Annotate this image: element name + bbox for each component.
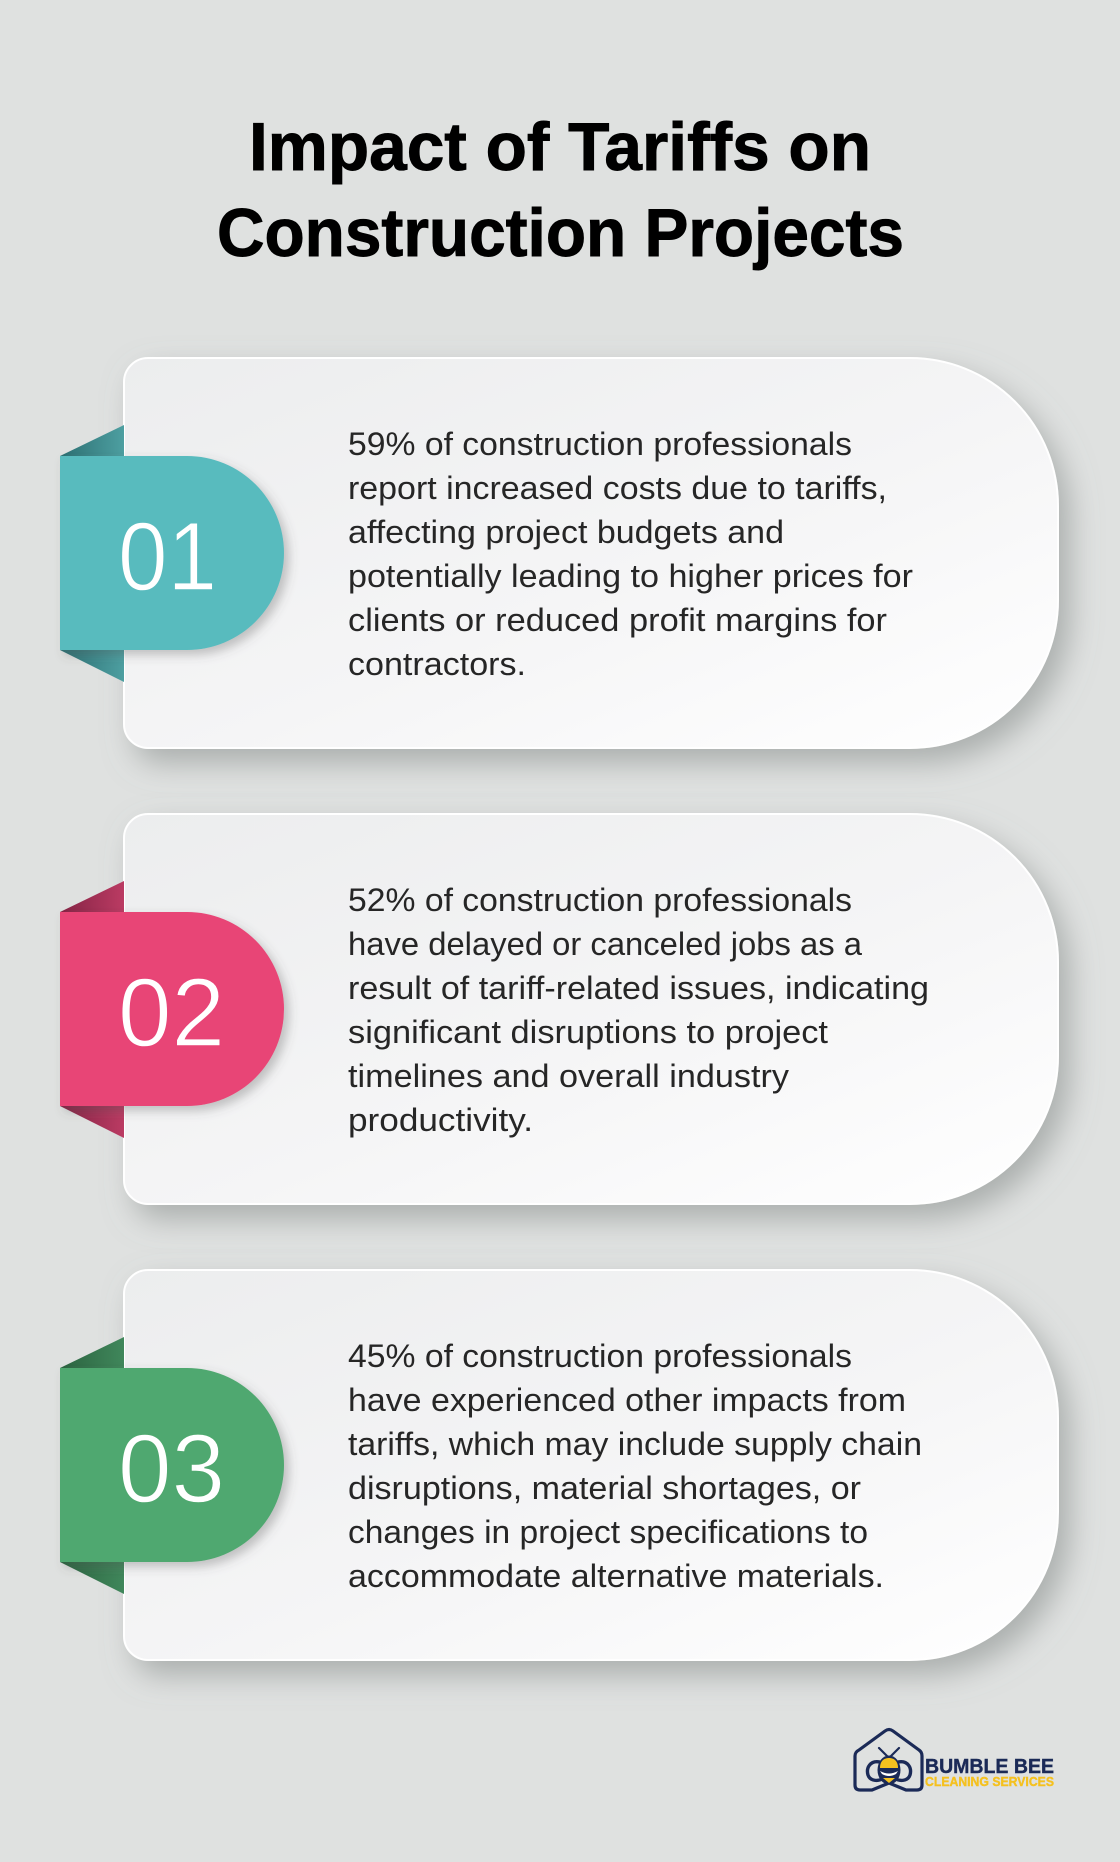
text block 01: affecting project budgets and <box>348 514 784 550</box>
ribbon fold top 01 <box>60 425 124 456</box>
panel: item 03 <box>60 1270 1058 1660</box>
text block 01: contractors. <box>348 646 526 682</box>
ribbon fold top 02 <box>60 881 124 912</box>
text block 02: result of tariff-related issues, indicating <box>348 970 929 1006</box>
panel: item 01 <box>60 358 1058 748</box>
logo wordmark: BUMBLE BEE <box>925 1755 1054 1778</box>
text block 03: have experienced other impacts from <box>348 1382 906 1418</box>
text block 01: report increased costs due to tariffs, <box>348 470 887 506</box>
logo: Bumble Bee Cleaning Services <box>855 1730 1054 1790</box>
title: Construction Projects <box>217 195 904 271</box>
text block 03: disruptions, material shortages, or <box>348 1470 861 1506</box>
card 02 <box>124 814 1058 1204</box>
card 03 <box>124 1270 1058 1660</box>
ribbon fold bottom 01 <box>60 650 124 682</box>
card 01 <box>124 358 1058 748</box>
text block 01: clients or reduced profit margins for <box>348 602 887 638</box>
text block 02: 52% of construction professionals <box>348 882 852 918</box>
text block 02: productivity. <box>348 1102 533 1138</box>
text block 01 <box>348 426 913 682</box>
text block 02 <box>348 882 929 1138</box>
number badge 01 <box>60 456 284 650</box>
icon: bee <box>868 1748 910 1784</box>
text block 03 <box>348 1338 922 1594</box>
number 01: 01 <box>118 502 217 611</box>
text block 02: have delayed or canceled jobs as a <box>348 926 863 962</box>
text block 02: significant disruptions to project <box>348 1014 828 1050</box>
title: Impact of Tariffs on <box>249 109 871 185</box>
text block 01: 59% of construction professionals <box>348 426 852 462</box>
text block 01: potentially leading to higher prices for <box>348 558 913 594</box>
text block 03: changes in project specifications to <box>348 1514 868 1550</box>
number 02: 02 <box>118 958 225 1067</box>
text block 03: accommodate alternative materials. <box>348 1558 884 1594</box>
number badge 03 <box>60 1368 284 1562</box>
panel: item 02 <box>60 814 1058 1204</box>
number badge 02 <box>60 912 284 1106</box>
text block 03: 45% of construction professionals <box>348 1338 852 1374</box>
text block 03: tariffs, which may include supply chain <box>348 1426 922 1462</box>
number 03: 03 <box>118 1414 225 1523</box>
ribbon fold bottom 02 <box>60 1106 124 1138</box>
icon: house outline <box>855 1730 922 1790</box>
ribbon fold bottom 03 <box>60 1562 124 1594</box>
text block 02: timelines and overall industry <box>348 1058 790 1094</box>
logo tagline: CLEANING SERVICES <box>925 1774 1054 1789</box>
ribbon fold top 03 <box>60 1337 124 1368</box>
title <box>217 109 904 271</box>
